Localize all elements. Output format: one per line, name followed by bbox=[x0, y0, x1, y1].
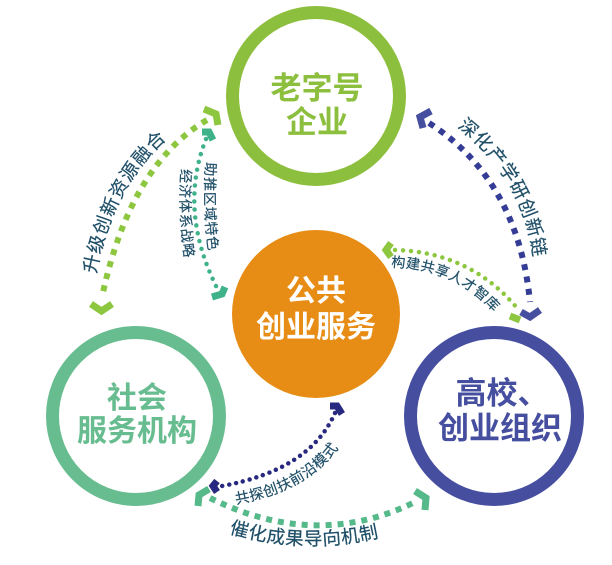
circle: social organizations bbox=[52, 332, 220, 500]
heading: top enterprise: 企业 bbox=[286, 105, 348, 140]
heading: universities: 高校、 bbox=[456, 376, 548, 411]
heading: public service centre: 公共 bbox=[286, 275, 346, 308]
label: regional economy link line one: 助推区域特色 bbox=[204, 162, 220, 250]
arrow: talent pool link bbox=[386, 243, 520, 320]
arrow: upgrade link bbox=[91, 109, 218, 311]
label: results mechanism link: 催化成果导向机制 bbox=[231, 519, 378, 547]
arrow: regional economy link bbox=[194, 132, 225, 297]
heading: universities: 创业组织 bbox=[438, 411, 562, 446]
label: upgrade link: 升级创新资源融合 bbox=[82, 132, 166, 274]
heading: top enterprise: 老字号 bbox=[270, 71, 364, 106]
label: frontier model link: 共探创扶前沿模式 bbox=[236, 442, 338, 505]
arrow: results mechanism link bbox=[198, 489, 426, 525]
arrow: industry research link bbox=[420, 111, 540, 317]
label: regional economy link line two: 经济体系战略 bbox=[179, 170, 196, 258]
label: talent pool link: 构建共享人才智库 bbox=[392, 255, 501, 311]
heading: social organizations: 服务机构 bbox=[77, 415, 197, 448]
heading: social organizations: 社会 bbox=[107, 382, 167, 415]
label: industry research link: 深化产学研创新链 bbox=[458, 116, 548, 257]
circle: public service centre bbox=[232, 230, 400, 398]
circle: universities bbox=[410, 332, 578, 500]
arrow: frontier model link bbox=[213, 406, 342, 492]
heading: public service centre: 创业服务 bbox=[256, 311, 376, 344]
circle: top enterprise bbox=[232, 12, 400, 180]
